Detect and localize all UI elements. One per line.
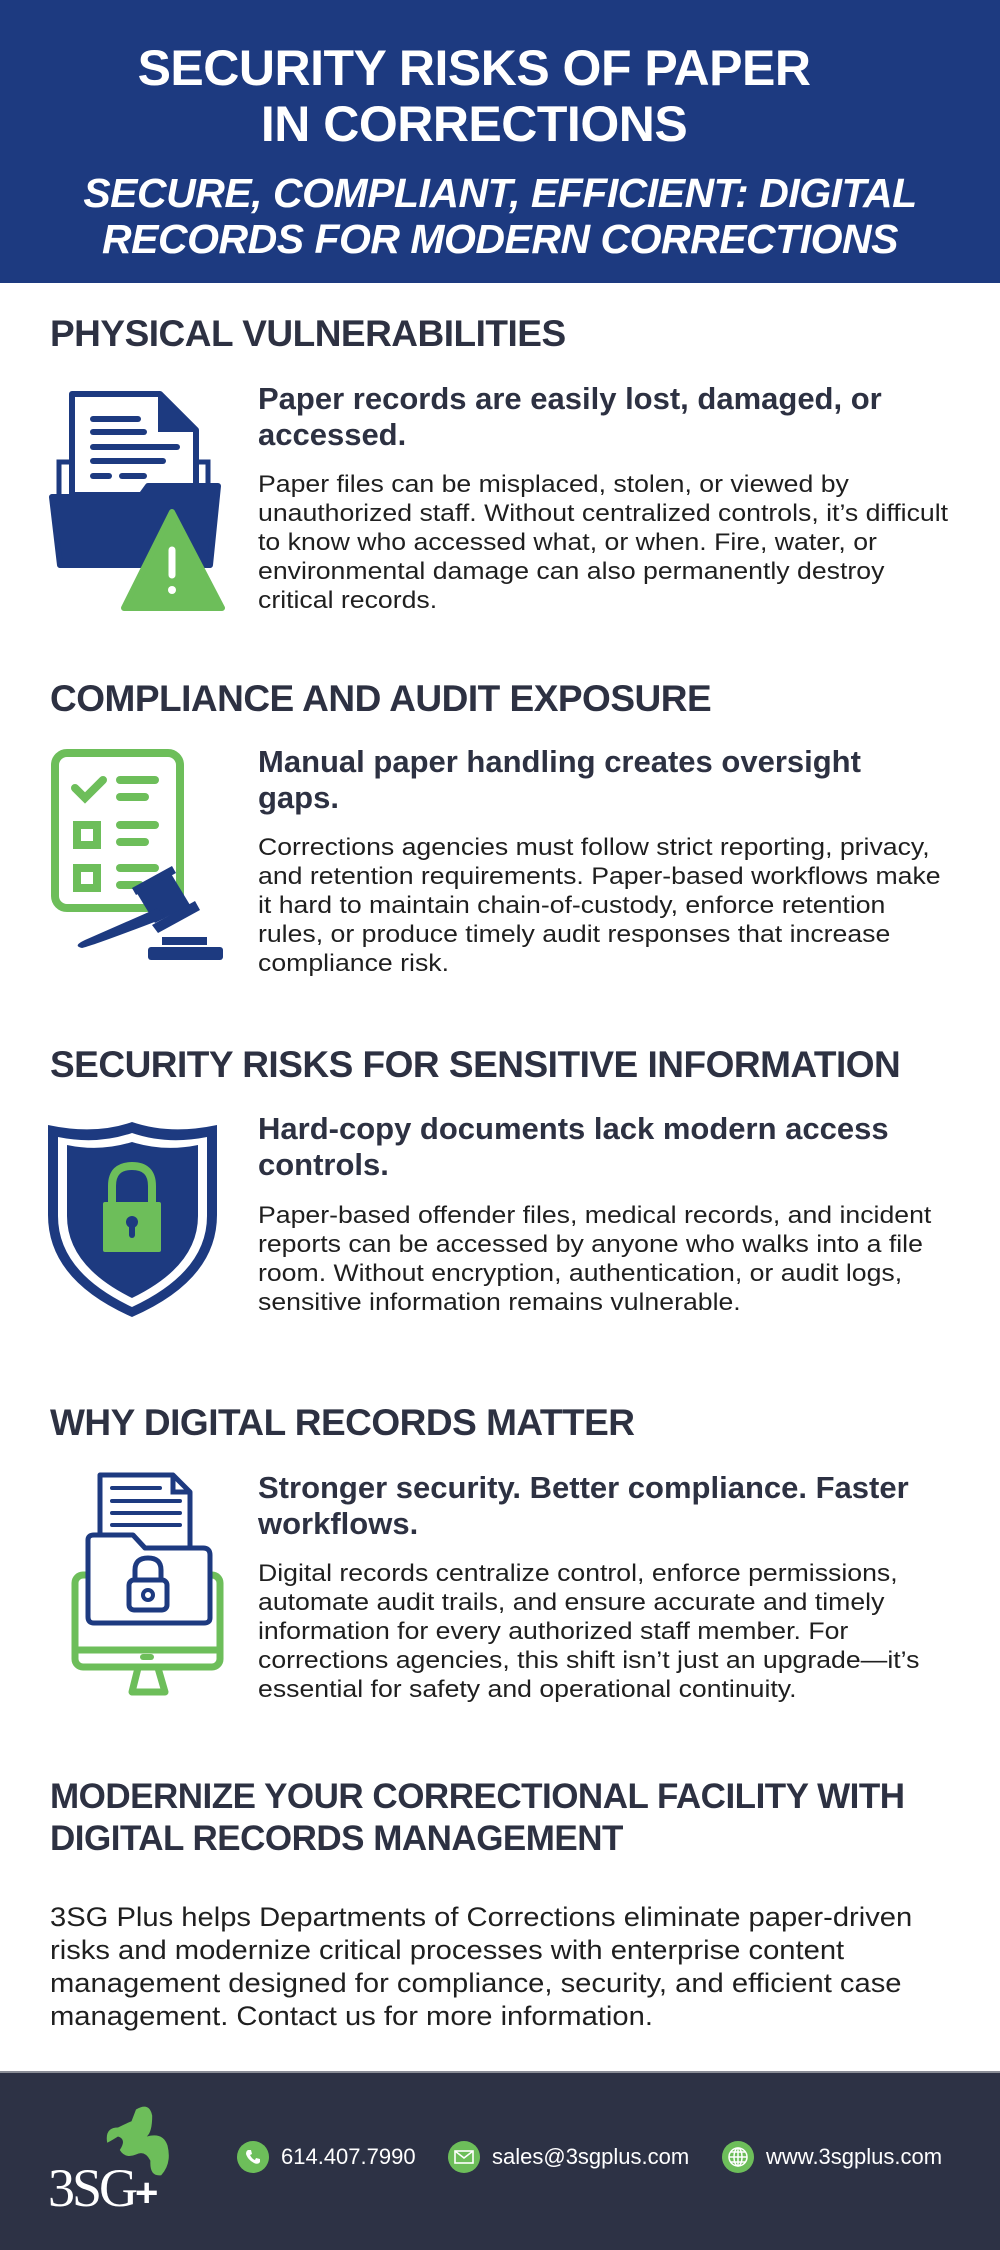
heading: compliance: COMPLIANCE AND AUDIT EXPOSURE [50,678,711,719]
body: modernize: management. Contact us for more information. [50,2001,653,2031]
heading: security: SECURITY RISKS FOR SENSITIVE INFORMATION [50,1044,900,1085]
body: compliance: it hard to maintain chain-of-custody, enforce retention [258,892,885,919]
icon: shield with padlock [48,1122,217,1317]
body: security: reports can be accessed by anyone who walks into a file [258,1231,923,1258]
subhead: why digital: Stronger security. Better compliance. Faster [258,1470,909,1505]
contact: website: www.3sgplus.com [766,2144,942,2169]
body: modernize [50,1902,912,2031]
body: physical: Paper files can be misplaced, stolen, or viewed by [258,471,849,498]
body: modernize: management designed for compliance, security, and efficient case [50,1968,902,1998]
body: security: sensitive information remains vulnerable. [258,1289,741,1316]
header banner [0,0,1000,283]
body: compliance: and retention requirements. Paper-based workflows make [258,863,941,890]
subhead: physical: accessed. [258,417,406,452]
subhead: compliance: Manual paper handling creates oversight [258,744,861,779]
title: SECURITY RISKS OF PAPER [138,40,810,96]
heading: physical vulnerabilities: PHYSICAL VULNERABILITIES [50,313,566,354]
icon: monitor with secure folder [72,1472,224,1696]
title [138,40,810,152]
body: modernize: risks and modernize critical processes with enterprise content [50,1935,844,1965]
body: why digital: essential for safety and operational continuity. [258,1676,797,1703]
heading: why digital: WHY DIGITAL RECORDS MATTER [50,1402,634,1443]
subhead: why digital [258,1470,909,1541]
contact: website [722,2141,942,2173]
logo: 3SG+ [48,2106,169,2218]
body: compliance: compliance risk. [258,950,449,977]
body: why digital [258,1560,919,1703]
body: why digital: information for every authorized staff member. For [258,1618,848,1645]
contact: email [448,2141,689,2173]
body: modernize: 3SG Plus helps Departments of Corrections eliminate paper-driven [50,1902,912,1932]
subtitle: SECURE, COMPLIANT, EFFICIENT: DIGITAL [83,170,917,216]
contact: email: sales@3sgplus.com [492,2144,689,2169]
heading: modernize [50,1777,905,1858]
body: why digital: Digital records centralize control, enforce permissions, [258,1560,898,1587]
body: compliance [258,834,941,977]
subtitle [83,170,917,262]
body: physical [258,471,948,614]
body: physical: environmental damage can also permanently destroy [258,558,884,585]
body: physical: to know who accessed what, or when. Fire, water, or [258,529,877,556]
body: why digital: automate audit trails, and ensure accurate and timely [258,1589,884,1616]
icon: checklist with gavel [51,749,223,960]
body: compliance: Corrections agencies must follow strict reporting, privacy, [258,834,930,861]
contact: phone: 614.407.7990 [281,2144,416,2169]
logo: 3SG+: 3SG+ [48,2158,155,2218]
body: physical: unauthorized staff. Without centralized controls, it’s difficult [258,500,948,527]
footer [0,2071,1000,2250]
subhead: security [258,1111,889,1182]
subtitle: RECORDS FOR MODERN CORRECTIONS [102,216,898,262]
body: physical: critical records. [258,587,437,614]
body: compliance: rules, or produce timely audit responses that increase [258,921,890,948]
subhead: physical: Paper records are easily lost, damaged, or [258,381,882,416]
subhead: compliance: gaps. [258,780,339,815]
body: security [258,1202,932,1316]
contact: phone [237,2141,416,2173]
body: security: Paper-based offender files, medical records, and incident [258,1202,931,1229]
heading: modernize: MODERNIZE YOUR CORRECTIONAL FACILITY WITH [50,1777,905,1816]
subhead: physical [258,381,882,452]
title: IN CORRECTIONS [261,96,687,152]
subhead: why digital: workflows. [258,1506,418,1541]
icon: folder with warning [49,391,225,611]
subhead: compliance [258,744,861,815]
subhead: security: controls. [258,1147,389,1182]
body: why digital: corrections agencies, this shift isn’t just an upgrade—it’s [258,1647,919,1674]
subhead: security: Hard-copy documents lack modern access [258,1111,889,1146]
heading: modernize: DIGITAL RECORDS MANAGEMENT [50,1819,623,1858]
body: security: room. Without encryption, authentication, or audit logs, [258,1260,902,1287]
